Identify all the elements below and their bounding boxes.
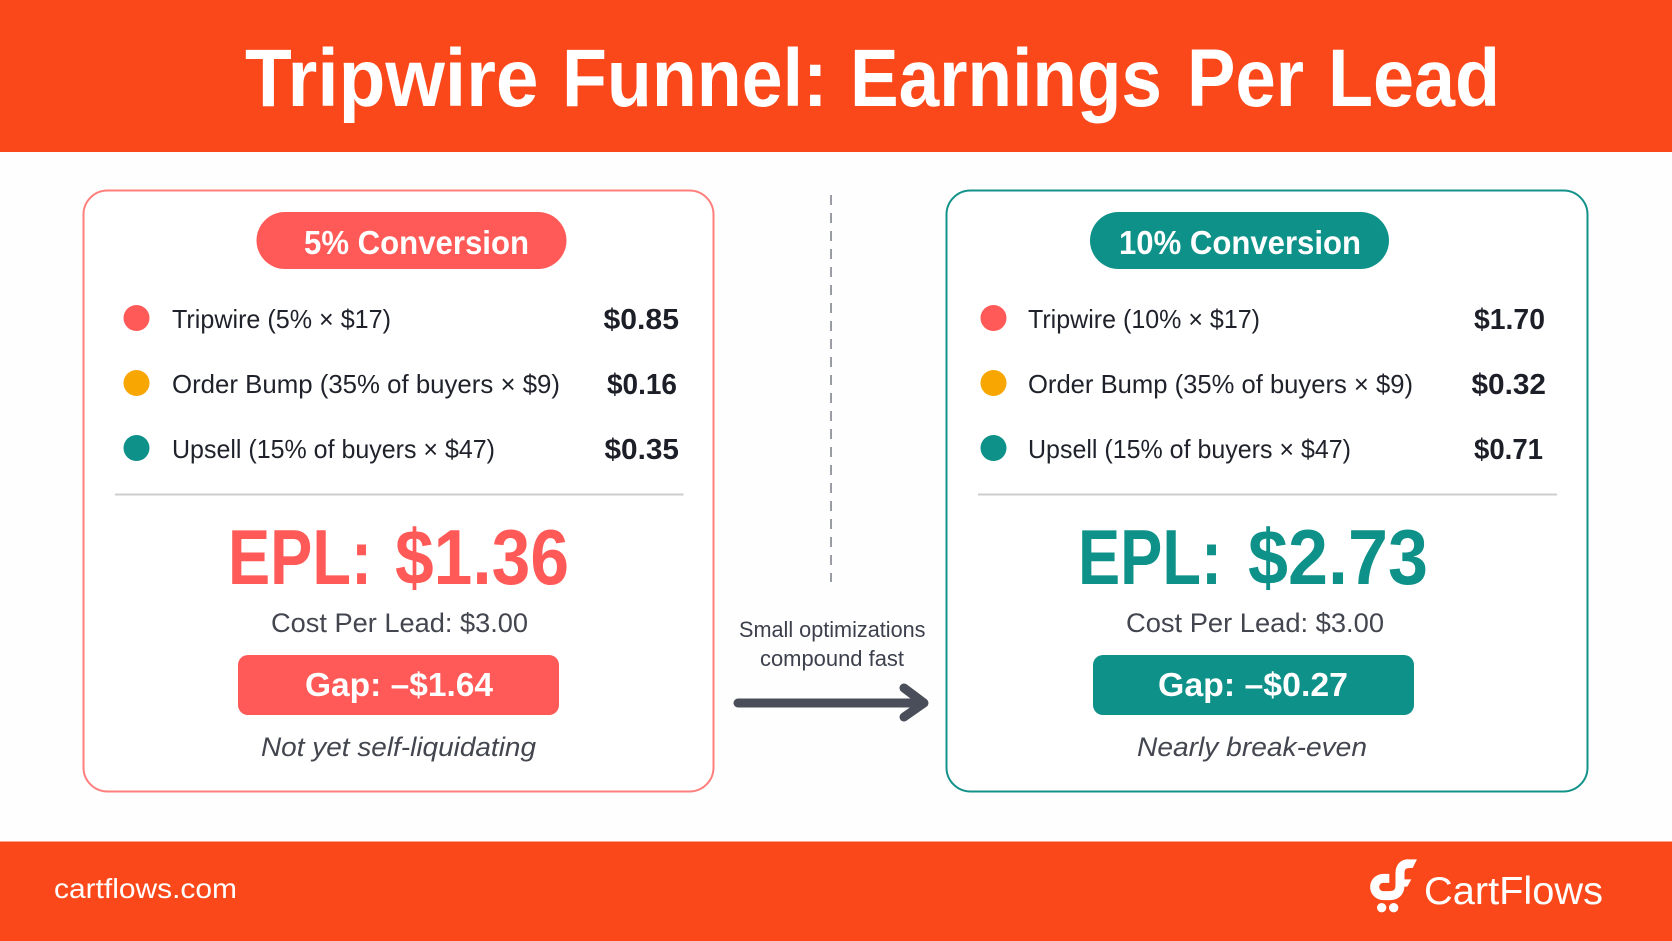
line item: tripwire [124,304,679,336]
cost per lead: Cost Per Lead: $3.00 [1126,608,1384,638]
footer banner [0,842,1672,941]
line item: upsell: Upsell (15% of buyers × $47) [172,434,495,464]
arrow [738,688,924,717]
line item: upsell [124,434,679,466]
center divider [830,195,832,582]
line item: tripwire: $0.85 [604,304,679,336]
line item: upsell: $0.35 [604,434,679,466]
logo: CartFlows: CartFlows [1424,870,1603,913]
EPL value: EPL: [228,513,372,601]
gap box: Gap: –$1.64 [305,666,494,703]
caption: small optimizations [739,617,926,671]
gap box [238,655,559,715]
line item: upsell: Upsell (15% of buyers × $47) [1028,434,1351,464]
gap box [1093,655,1414,715]
line item: order bump [124,369,677,401]
line item: order bump [980,369,1546,401]
badge: 10% conversion: 10% Conversion [1119,224,1361,261]
badge: 5% conversion [256,212,566,269]
line item: order bump: Order Bump (35% of buyers × $9) [172,369,560,399]
line item: tripwire: Tripwire (10% × $17) [1028,304,1260,334]
title: Tripwire [245,33,538,124]
line item: tripwire: $1.70 [1474,304,1545,336]
panel: 5% conversion [84,190,714,792]
line item: order bump: Order Bump (35% of buyers × $9) [1028,369,1413,399]
badge: 5% conversion: 5% Conversion [304,224,529,261]
line item: tripwire [980,304,1545,336]
panel: 10% conversion [946,190,1588,792]
EPL value: $2.73 [1248,513,1428,601]
icon: cart mark [1375,859,1417,912]
line item: upsell [980,434,1543,466]
verdict note: Not yet self-liquidating [261,732,536,762]
title: Lead [1328,33,1500,124]
EPL value: $1.36 [395,513,569,601]
EPL value [1078,513,1428,601]
title: Per [1187,33,1304,124]
line item: order bump: $0.16 [607,369,677,401]
caption: small optimizations: Small optimizations [739,617,926,642]
title [245,33,1500,124]
line item: order bump: $0.32 [1472,369,1546,401]
cost per lead: Cost Per Lead: $3.00 [271,608,528,638]
logo: CartFlows [1375,859,1603,913]
title: Earnings [850,33,1162,124]
gap box: Gap: –$0.27 [1158,666,1348,703]
line item: tripwire: Tripwire (5% × $17) [172,304,391,334]
EPL value: EPL: [1078,513,1222,601]
verdict note: Nearly break-even [1137,732,1367,762]
badge: 10% conversion [1090,212,1389,269]
header banner [0,0,1672,152]
EPL value [228,513,569,601]
line item: upsell: $0.71 [1474,434,1543,466]
title: Funnel: [562,33,828,124]
website: cartflows.com [54,873,237,904]
caption: small optimizations: compound fast [760,646,904,671]
